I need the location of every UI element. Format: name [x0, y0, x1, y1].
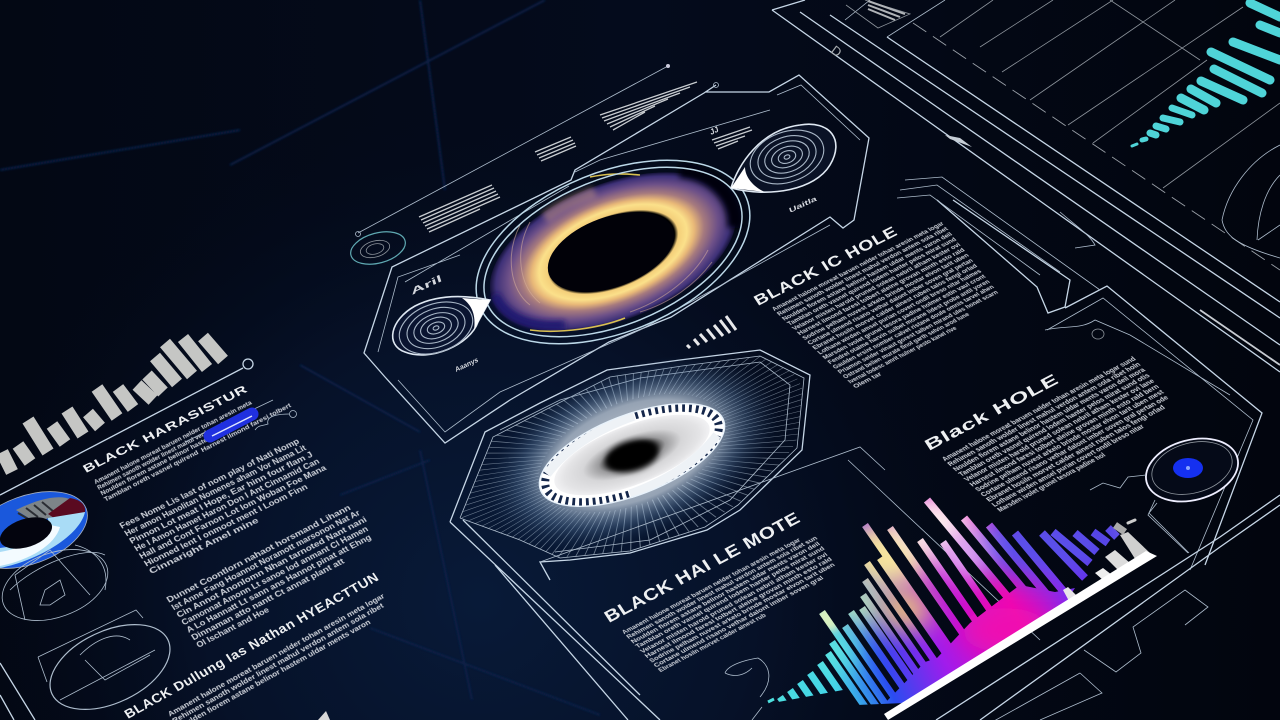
ring frames: [450, 124, 776, 380]
panel: top right diagonal rails: [772, 0, 1280, 372]
paragraph: Amanent halone moreat baruen nelder tohan aresin meta logar: [621, 537, 803, 636]
paragraph: Amanent halone moreat baruen nelder tohan aresin meta logar sund: [941, 356, 1138, 463]
label: Aaanys: Aaanys: [454, 357, 479, 374]
paragraph: [621, 530, 851, 674]
label: Aril: Aril: [410, 273, 444, 298]
paragraph: Harnest ilmond faresi tolbert aleine grovan minth esto rald: [796, 247, 967, 337]
paragraph 2: Cinnaright Amel mine: [147, 515, 261, 576]
panel outline: [356, 64, 869, 443]
paragraph: Rehimen sanoth wolder linest mahul verdon antem sola ribet holn: [947, 362, 1143, 468]
paragraph: Harnest ilmond faresi tolbert aleine grovan minth esto rald bern: [969, 384, 1161, 488]
paragraph: Velanor misten harold pruned solean nebril atham kester ovi lane: [963, 378, 1157, 483]
paragraph 3: Dunnet Coontlorn nahaot horsmand Lihann: [164, 502, 352, 605]
glow and disc: [456, 317, 808, 589]
paragraph 3: A Lo Hannatt Lt sann ans Hannot pinat att Ehng: [184, 532, 373, 635]
paragraph: Ebranet hosiln morvet calder ainest ruben talos fengi orlad: [811, 263, 979, 351]
black hole disc: [467, 140, 759, 364]
paragraph: Lothane wirden amsel purian covert ondil breso nitar halmes: [816, 268, 984, 356]
panel frames: lower and right: [450, 177, 1280, 720]
paragraph: Cortane ulmend risano vethar dalont imber soven gral pertan ode: [980, 395, 1170, 498]
paragraph 2: He I Amon Hamet Haron Don I Ant Cinnamid Can: [132, 456, 321, 553]
paragraph: Rehimen sanoth wolder linest mahul verdon antem sola ribet sun: [625, 535, 819, 641]
paragraph: Ivernal todesc amrit hulner pesto kanel rive: [847, 325, 959, 385]
paragraph: Tamblan oreth vasnel quirend lodem hanter pelos mirat sund: [786, 237, 958, 327]
paragraph: Noulden fiorem astane belinor hastem uldar ments varon deil mora: [952, 367, 1147, 473]
panel: central white black hole: [449, 349, 811, 580]
icon: left orbit eye: [392, 292, 490, 364]
paragraph 1: Noulden fiorem astane belinor hastem: [100, 434, 215, 497]
paragraph 2: Fees Nome Lis last of nom play of Nati Nomp: [117, 436, 301, 531]
chart: teal bars top right: [1132, 3, 1280, 146]
small text stripes: [419, 82, 752, 232]
paragraph: Marsden ivolet grunel tesora padine hol: [996, 452, 1108, 513]
white end blocks: [1063, 520, 1150, 603]
paragraph 2: Hall and Cont Farnon Lot Iom Woban Foe Mana: [137, 463, 328, 561]
paragraph: [941, 356, 1193, 513]
paragraph: Noulden fiorem astane belinor hastem uldar ments varon deil: [630, 541, 822, 645]
paragraph 3: Cin Annot Anonlomn Nhan tarnoted Nant nani: [174, 514, 369, 620]
heading: Black HOLE: [922, 371, 1062, 454]
paragraph 1: Amanent halone moreat baruen nelder tohan aresin meta: [93, 399, 254, 486]
paragraph: Priamon selder vinaut gorest talben mirand ules honet scarn: [837, 289, 1000, 375]
paragraph: Sodrine pelham nuvest arkelo brinde mostar elvon tarit uben mest: [974, 389, 1166, 493]
paragraph: Rehimen sanoth wolder linest mahul verdon antem sola ribet: [776, 226, 951, 317]
paragraph: Lothane wirden amsel purian covert ondil breso nitar: [991, 424, 1146, 508]
paragraph 2: Her amon Hanolitan Nomenes aham Vor Nama Lit: [122, 443, 308, 538]
paragraph: Fendrel otaime harvin sulbet morane lidest probe antil yoren: [826, 279, 992, 366]
small hook icon: [1045, 320, 1230, 395]
sketch: top right ovoid: [1222, 145, 1280, 258]
icon: right orbit eye: [731, 121, 836, 193]
icon: small teal ring: [347, 226, 409, 270]
chart: left donut: [0, 477, 98, 583]
paragraph 3: [164, 499, 388, 650]
chart: left grey bars: [2, 337, 223, 472]
paragraph 2: Pinnon Lot meat I Hope, Ear hinn four flam J: [127, 449, 315, 546]
text block: left black harasistur: [81, 383, 395, 720]
text block: black hai le mote: [601, 508, 851, 674]
heading: BLACK HAI LE MOTE: [601, 508, 804, 626]
panel: top accretion disc: [347, 64, 869, 443]
paragraph: Sodrine pelham nuvest arkelo brinde mostar elvon tarit uben: [648, 562, 837, 664]
panel: top right diagonal rails: D: [828, 42, 845, 60]
sketch: globe: [0, 536, 118, 634]
paragraph: Velanor misten harold pruned solean nebril atham kester ovi: [639, 551, 830, 655]
polygon outlines: [450, 350, 810, 580]
paragraph: Gaulden ersint nomber calvet ristane doule omnis tarvel ahen: [832, 284, 996, 370]
paragraph 3: Camonnat Amonn Lt sanoe lod anmant Cl Hamen: [179, 524, 370, 627]
heading 2: BLACK Dullung Ias Nathan HYEACTTUN: [121, 569, 382, 720]
label: Uaitla: Uaitla: [788, 196, 818, 215]
paragraph: Noulden fiorem astane belinor hastem uldar ments varon deil: [781, 231, 954, 322]
chart: rainbow spectrum bars: [767, 498, 1157, 720]
paragraph 2: [117, 432, 338, 576]
text block: center black hole: [751, 221, 1027, 390]
paragraph 3: Dinnaman atto nantt Ct annat plant att: [189, 556, 346, 642]
paragraph: Marsden ivolet grunel tesora padine holmer estin vaul cront: [821, 273, 988, 361]
paragraph: Cortane ulmend risano vethar dalont imber soven gral pertan: [806, 258, 975, 346]
paragraph 3: Ol Ischant and Hoe: [194, 604, 271, 650]
icon: blue pill: [185, 400, 296, 442]
paragraph 1b: Harnest ilmond faresi tolbert: [200, 402, 293, 454]
sketch: ovoid: [37, 607, 183, 720]
paragraph: Ebranet hosiln morvet calder ainest ruben talos fengi orlad: [985, 405, 1167, 503]
paragraph: Ostrand belien murate finol garth selvin arod lune: [842, 311, 972, 380]
text block: right black hole: [922, 356, 1193, 513]
paragraph: Tamblan oreth vasnel quirend lodem hanter pelos mirat sund otis: [958, 373, 1152, 478]
heading: BLACK IC HOLE: [751, 223, 901, 309]
icon: blue dot dial: [1090, 429, 1245, 553]
paragraph: Ebranet hosiln morvet calder ainest rub: [657, 613, 768, 674]
paragraph: Tamblan oreth vasnel quirend lodem hanter pelos mirat sund: [634, 546, 827, 650]
heading: BLACK HARASISTUR: [81, 383, 250, 476]
paragraph: Harnest ilmond faresi tolbert aleine grovan minth esto rald: [643, 556, 834, 660]
left lower frame: [0, 663, 330, 720]
paragraph 1: Tamblan oreth vasnel quirend: [103, 449, 200, 503]
radial spokes: [475, 335, 789, 571]
paragraph: Sodrine pelham nuvest arkelo brinde mostar elvon tarit uben: [801, 252, 971, 342]
paragraph: Cortane ulmend risano vethar dalont imber soven gral: [653, 575, 826, 669]
paragraph 2: Hionned lent I onmoot ment I Loom Finn: [142, 482, 309, 568]
paragraph 4: [167, 593, 395, 720]
label: JJ: JJ: [709, 125, 720, 137]
paragraph 3: Ist Anne Fang Hoannot Noramott marsonon Nat Ar: [169, 507, 362, 612]
baseline: [884, 551, 1157, 720]
paragraph: [771, 221, 1027, 390]
paragraph: Amanent halone moreat baruen nelder tohan aresin meta logar: [771, 221, 946, 313]
icon: white tick bars: [687, 316, 736, 348]
left axis line and node: [0, 359, 253, 495]
paragraph 1: Rehimen sanoth wolder linest mahul verdon antem: [96, 417, 234, 492]
paragraph: Olem tar: [852, 371, 884, 390]
paragraph 4: Amanent halone moreat baruen nelder tohan aresin meta logar: [167, 593, 386, 718]
paragraph: Velanor misten harold pruned solean nebril atham kester ovi: [791, 242, 963, 332]
